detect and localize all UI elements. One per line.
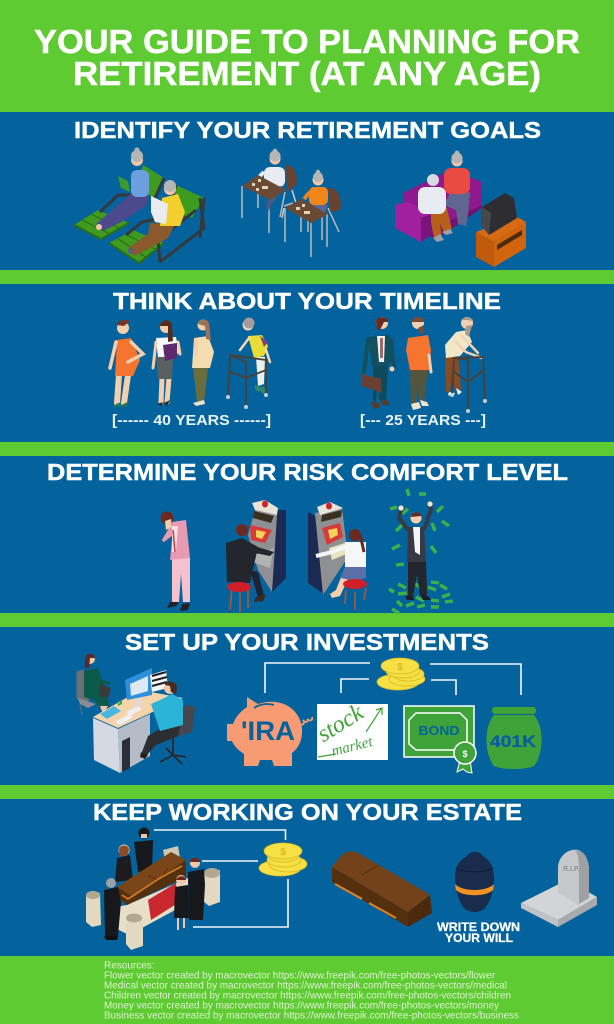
heading: investments: SET UP YOUR INVESTMENTS (125, 629, 489, 655)
connector lines: estate to coins (154, 830, 288, 927)
connector lines: coins to investments (265, 663, 521, 695)
label: write down your will: WRITE DOWN (437, 922, 520, 934)
label: write down your will (437, 922, 520, 945)
illustration: gravestone (521, 850, 597, 927)
label: write down your will: YOUR WILL (445, 933, 513, 945)
icon: gold coins: $ (280, 847, 286, 858)
icon: 401k jar: 401K (490, 732, 537, 751)
illustration: casket (332, 851, 432, 927)
illustration: winner with flying money (389, 489, 453, 613)
heading: timeline: THINK ABOUT YOUR TIMELINE (113, 288, 501, 314)
icon: gold coins (259, 843, 307, 876)
footer: resources: Money vector created by macrovector https://www.freepik.com/free-photos-vectors/money (104, 1000, 499, 1012)
footer: resources (104, 960, 519, 1022)
icon: stock market card: stock (313, 699, 368, 748)
illustration: women on park benches (74, 147, 204, 263)
icon: bond certificate (404, 706, 476, 773)
title: RETIREMENT (AT ANY AGE) (73, 55, 541, 92)
illustration: gravestone: R.I.P. (563, 866, 580, 873)
footer: resources: Resources: (104, 960, 155, 972)
title: YOUR GUIDE TO PLANNING FOR (34, 23, 580, 60)
title (34, 23, 580, 92)
heading: goals: IDENTIFY YOUR RETIREMENT GOALS (74, 117, 541, 143)
heading: risk: DETERMINE YOUR RISK COMFORT LEVEL (47, 459, 568, 485)
label: 25 years: [--- 25 YEARS ---] (360, 413, 486, 429)
panel: set up your investments (0, 627, 614, 785)
illustration: couple with office advisor (77, 654, 195, 773)
illustration: three men aging (362, 317, 487, 413)
footer: resources: Business vector created by macrovector https://www.freepik.com/free-photos-vectors/business (104, 1010, 519, 1022)
heading: estate: KEEP WORKING ON YOUR ESTATE (93, 799, 522, 825)
illustration: urn (455, 852, 494, 912)
illustration: worried man in pink suit (160, 512, 190, 611)
illustration: woman at slot machine (308, 502, 367, 610)
panel: keep working on your estate (0, 799, 614, 956)
illustration: seniors playing at tables (242, 149, 341, 257)
icon: bond certificate: $ (462, 749, 468, 759)
footer: resources: Children vector created by macrovector https://www.freepik.com/free-photos-vectors/children (104, 990, 511, 1002)
illustration: man at slot machine (226, 500, 286, 612)
illustration: funeral scene (86, 828, 220, 950)
footer: resources: Flower vector created by macrovector https://www.freepik.com/free-photos-vectors/flower (104, 970, 496, 982)
icon: stock market card (313, 699, 388, 760)
illustration: four women aging (110, 318, 270, 409)
icon: IRA piggy bank: 'IRA (241, 716, 295, 746)
icon: gold coins (377, 658, 425, 690)
icon: stock market card: market (330, 734, 375, 760)
illustration: couple on purple sofa watching tv (395, 151, 526, 267)
icon: gold coins: $ (397, 662, 403, 673)
icon: IRA piggy bank (227, 697, 312, 766)
footer: resources: Medical vector created by macrovector https://www.freepik.com/free-photos-vectors/medical (104, 980, 507, 992)
icon: bond certificate: BOND (418, 724, 460, 738)
panel: identify your retirement goals (0, 112, 614, 270)
icon: 401k jar (486, 707, 542, 769)
panel: determine your risk comfort level (0, 456, 614, 613)
label: 40 years: [------ 40 YEARS ------] (112, 413, 271, 429)
panel: think about your timeline (0, 284, 614, 442)
